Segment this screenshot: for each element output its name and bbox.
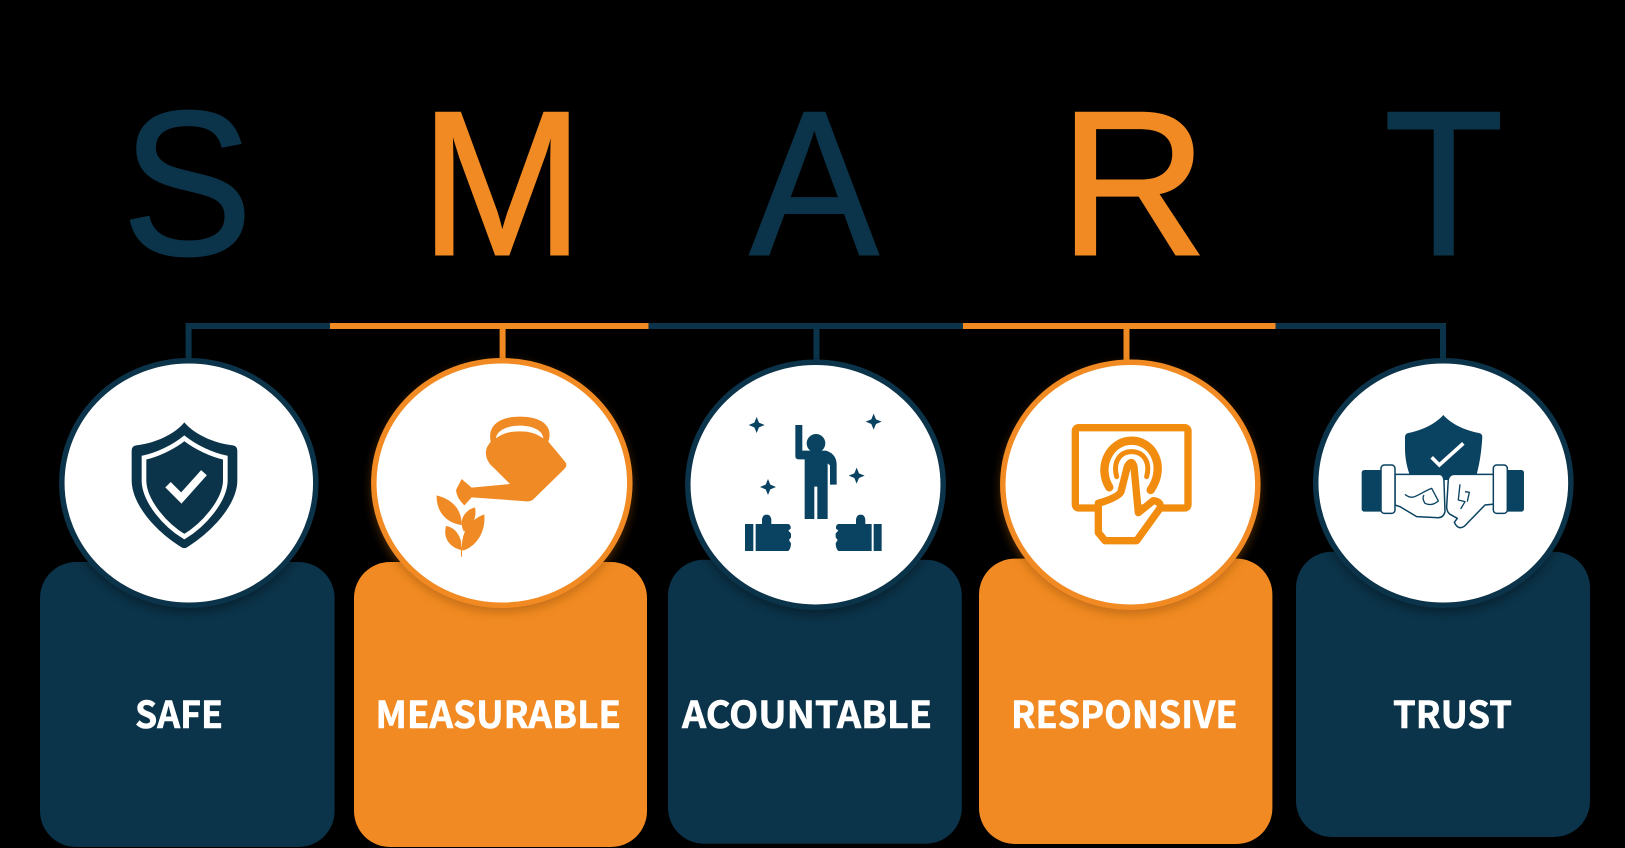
measurable circle	[372, 361, 632, 612]
label: acountable: ACOUNTABLE	[681, 685, 932, 739]
title: SMART letters: A	[750, 69, 879, 299]
label: safe: SAFE	[135, 685, 223, 739]
icon: shield with check	[132, 422, 237, 548]
icon: fist bump with shield	[1362, 415, 1524, 528]
title: SMART letters: R	[1059, 68, 1208, 298]
panel: accountable	[668, 362, 962, 844]
label: measurable: MEASURABLE	[376, 685, 621, 739]
trust card	[1296, 552, 1590, 837]
title: SMART letters: T	[1384, 68, 1504, 299]
label: responsive: RESPONSIVE	[1011, 685, 1238, 739]
accountable card	[668, 560, 962, 844]
label: trust: TRUST	[1393, 685, 1512, 739]
title: SMART letters	[122, 68, 1504, 299]
icon: person with thumbs up and stars	[745, 414, 882, 551]
panel: responsive	[979, 362, 1272, 844]
responsive card	[979, 559, 1272, 844]
title: SMART letters: S	[122, 68, 253, 299]
responsive circle	[1001, 362, 1260, 614]
connector lines	[186, 323, 1446, 361]
panel: trust	[1296, 361, 1590, 837]
trust circle	[1314, 361, 1572, 612]
measurable card	[354, 562, 647, 847]
icon: watering can and plant	[437, 417, 566, 557]
panel: measurable	[354, 361, 647, 847]
panel: safe	[40, 361, 335, 847]
accountable circle	[686, 362, 944, 614]
title: SMART letters: M	[420, 68, 584, 298]
icon: finger touching screen	[1075, 428, 1188, 541]
safe circle	[60, 361, 318, 612]
safe card	[40, 562, 335, 847]
